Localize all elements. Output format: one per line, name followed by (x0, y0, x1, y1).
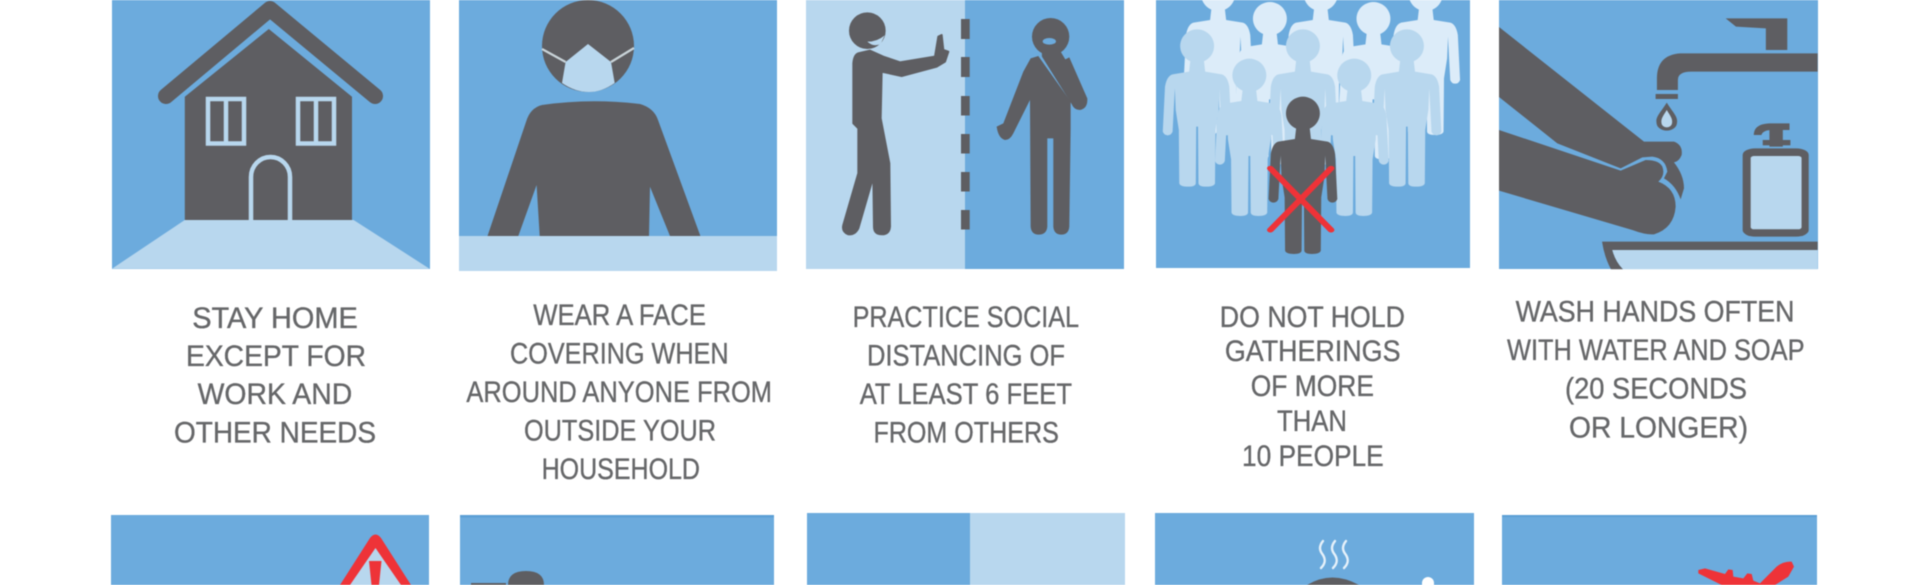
caption: stay home: EXCEPT FOR (186, 340, 366, 373)
icon: steam (1320, 541, 1348, 568)
caption: stay home: STAY HOME (192, 302, 358, 335)
panel: fever (lower row) (1155, 513, 1474, 585)
caption: wash hands: WASH HANDS OFTEN (1516, 296, 1794, 328)
caption: face covering: WEAR A FACE (533, 299, 706, 332)
caption: stay home: WORK AND (198, 378, 352, 411)
caption: no gatherings: DO NOT HOLD (1220, 301, 1405, 334)
caption: social distancing: PRACTICE SOCIAL (853, 301, 1079, 334)
panel: no travel (lower row) (1502, 515, 1817, 585)
panel: face covering (459, 0, 777, 271)
icon: warning triangle (340, 534, 411, 585)
caption: social distancing: AT LEAST 6 FEET (860, 378, 1072, 411)
panel: warning (lower row) (111, 515, 429, 585)
caption: wash hands: OR LONGER) (1569, 412, 1748, 444)
caption: face covering: AROUND ANYONE FROM (466, 376, 772, 409)
panel: stay home (112, 0, 430, 269)
icon: red airplane (1698, 562, 1794, 585)
icon: hands, faucet and soap (1499, 18, 1818, 269)
icon: thermometer (1422, 577, 1434, 585)
icon: person with mask (488, 0, 700, 236)
icon: person with raised hand (843, 13, 948, 234)
panel: social distancing (806, 0, 1124, 269)
caption: no gatherings: THAN (1277, 405, 1347, 438)
panel: person (lower row) (460, 515, 774, 585)
caption: social distancing (853, 301, 1079, 450)
caption: no gatherings: OF MORE (1251, 370, 1374, 403)
caption: wash hands: (20 SECONDS (1565, 372, 1747, 406)
icon: crowd (1163, 0, 1460, 254)
icon: house (112, 9, 430, 269)
panel: no gatherings (1156, 0, 1470, 268)
caption: no gatherings: GATHERINGS (1225, 335, 1400, 368)
caption: face covering: COVERING WHEN (510, 338, 729, 370)
caption: stay home: OTHER NEEDS (174, 416, 376, 450)
caption: face covering: OUTSIDE YOUR (524, 414, 716, 448)
caption: face covering (466, 299, 772, 486)
icon: dashed divider (961, 19, 970, 230)
caption: face covering: HOUSEHOLD (542, 453, 700, 486)
caption: social distancing: DISTANCING OF (867, 340, 1065, 372)
caption: no gatherings (1220, 301, 1405, 473)
icon: head (1307, 578, 1359, 585)
caption: wash hands (1507, 296, 1804, 444)
caption: social distancing: FROM OTHERS (874, 416, 1059, 450)
panel: split background (lower row) (807, 513, 1125, 585)
caption: wash hands: WITH WATER AND SOAP (1507, 334, 1804, 367)
caption: stay home (174, 302, 376, 450)
caption: no gatherings: 10 PEOPLE (1242, 440, 1384, 473)
icon: person top (471, 571, 544, 585)
icon: person coughing (997, 18, 1087, 235)
panel: wash hands (1499, 0, 1818, 269)
